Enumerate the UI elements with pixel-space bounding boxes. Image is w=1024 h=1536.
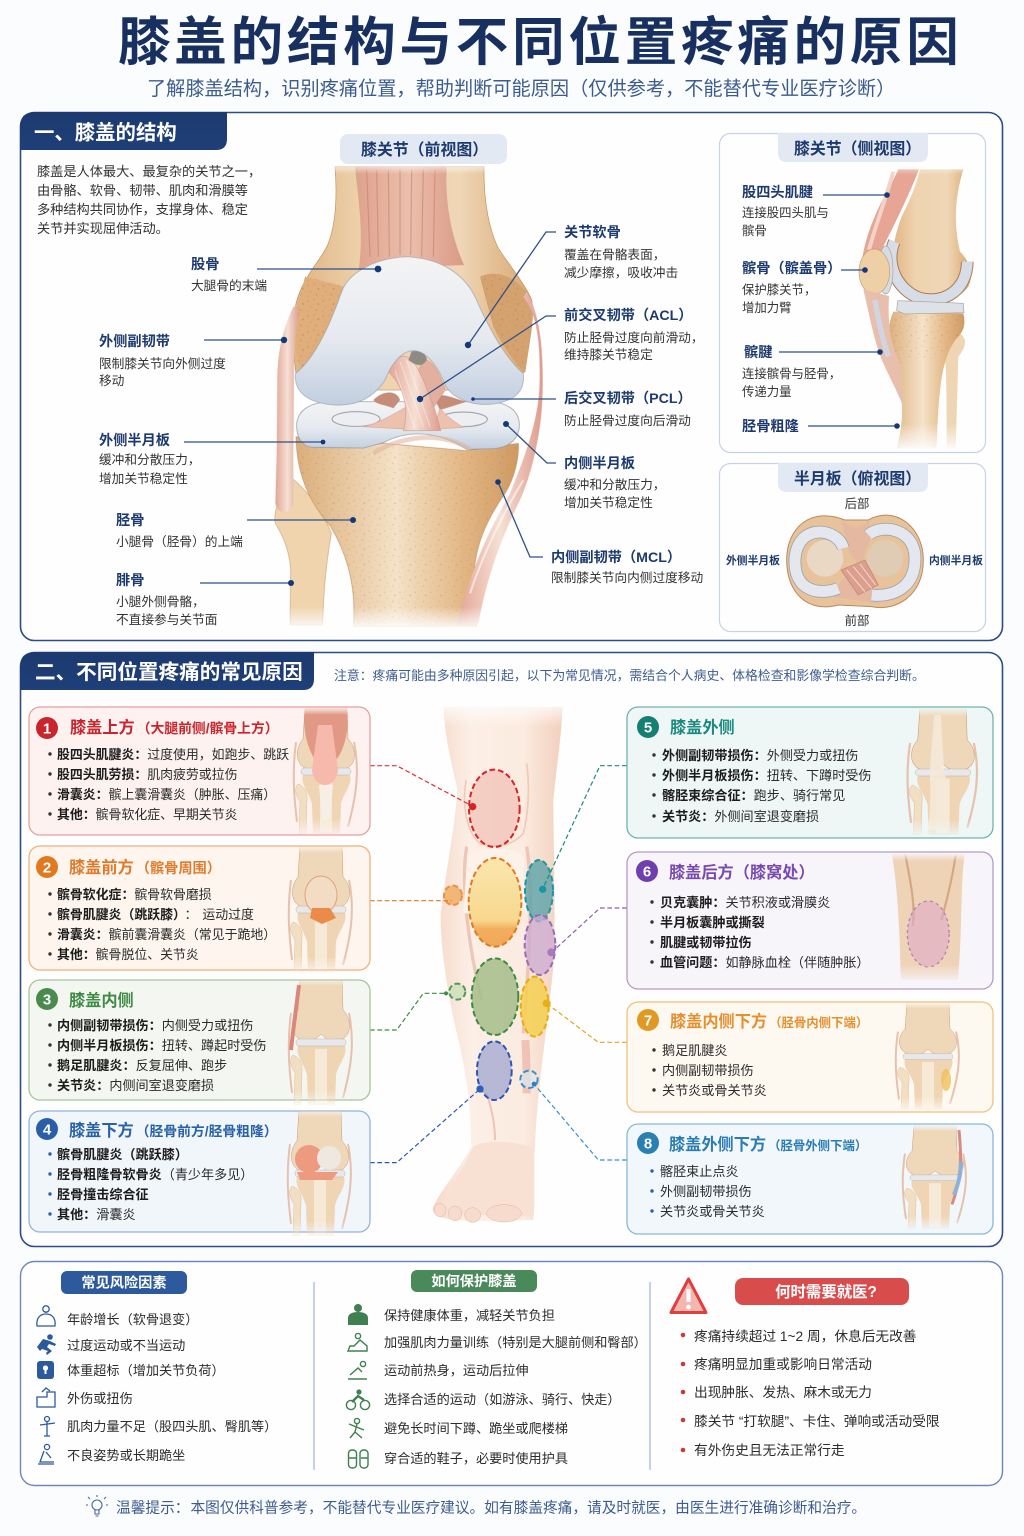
badge 6: 6 [643, 864, 651, 880]
list 7: 关节炎或骨关节炎 [662, 1083, 767, 1098]
label: fibula [116, 573, 218, 627]
side view heading: 膝关节（侧视图） [794, 139, 921, 158]
list 8: 关节炎或骨关节炎 [660, 1204, 765, 1219]
list 2: 髌骨软化症：髌骨软骨磨损 [57, 887, 212, 902]
badge 7: 7 [644, 1012, 652, 1030]
label: quad tendon [742, 185, 890, 238]
section heading: structure [20, 112, 227, 150]
heading 6: 膝盖后方（膝窝处） [669, 863, 815, 882]
list 1: 其他：髌骨软化症、早期关节炎 [57, 807, 238, 822]
label: lateral collateral ligament [99, 333, 226, 388]
leader lines: front view [184, 232, 556, 586]
badge 7 [637, 1009, 659, 1031]
list 6: 半月板囊肿或撕裂 [660, 914, 765, 930]
card 5: lateral [627, 707, 993, 838]
label: lateral collateral ligament: 移动 [99, 374, 124, 388]
zone 2 [444, 858, 521, 947]
thumbnail 8 [903, 1126, 966, 1229]
list 7: 内侧副韧带损伤 [662, 1063, 754, 1078]
label: quad tendon: 髌骨 [742, 223, 767, 238]
intro text: 膝盖是人体最大、最复杂的关节之一， [37, 164, 261, 179]
label: quad tendon: 连接股四头肌与 [742, 205, 829, 220]
labels: meniscus view: 外侧半月板 [726, 553, 780, 567]
intro text [37, 164, 261, 236]
label: fibula: 不直接参与关节面 [116, 612, 218, 627]
list 1 [48, 747, 289, 822]
labels: meniscus view: 后部 [845, 496, 869, 511]
doctor list: 疼痛明显加重或影响日常活动 [694, 1356, 872, 1372]
label: patella: 髌骨（髌盖骨） [742, 260, 841, 277]
label: MCL: 限制膝关节向内侧过度移动 [551, 570, 703, 585]
column: risk factors [37, 1271, 277, 1464]
protection list: 避免长时间下蹲、跪坐或爬楼梯 [384, 1421, 568, 1436]
label: medial meniscus: 增加关节稳定性 [564, 495, 653, 510]
list 3 [48, 1017, 266, 1093]
badge 5 [637, 716, 659, 738]
tip text: 温馨提示：本图仅供科普参考，不能替代专业医疗建议。如有膝盖疼痛，请及时就医，由医生进行准确诊断和治疗。 [116, 1500, 866, 1516]
list 3: 内侧副韧带损伤：内侧受力或扭伤 [57, 1017, 253, 1033]
label: patella [742, 260, 868, 315]
label: cartilage: 关节软骨 [564, 224, 621, 241]
doctor list [681, 1328, 940, 1458]
doctor list: 膝关节 “打软腿”、卡住、弹响或活动受限 [694, 1413, 940, 1429]
thumbnail 3 [289, 979, 352, 1105]
list 3: 关节炎：内侧间室退变磨损 [57, 1077, 214, 1093]
labels: meniscus view [726, 496, 983, 628]
heading 8: 膝盖外侧下方（胫骨外侧下端） [669, 1135, 867, 1154]
list 6 [650, 895, 870, 970]
intro text: 多种结构共同协作，支撑身体、稳定 [37, 201, 248, 217]
list 5: 髂胫束综合征：跑步、骑行常见 [662, 787, 845, 803]
list 6: 血管问题：如静脉血栓（伴随肿胀） [660, 954, 870, 970]
label: lateral meniscus: 外侧半月板 [99, 432, 170, 449]
label: patellar tendon: 传递力量 [742, 384, 792, 399]
badge 8: 8 [644, 1136, 652, 1152]
label: quad tendon: 股四头肌腱 [742, 185, 813, 201]
badge 1: 1 [43, 720, 51, 738]
illustration: leg with pain zones [370, 707, 627, 1222]
card 3: medial [29, 979, 370, 1105]
risk list: 不良姿势或长期跪坐 [67, 1448, 185, 1463]
heading 3: 膝盖内侧 [69, 992, 134, 1010]
label: tibial tuberosity: 胫骨粗隆 [742, 418, 800, 435]
risk heading [61, 1271, 187, 1294]
protection heading: 如何保护膝盖 [431, 1273, 517, 1290]
label: PCL: 防止胫骨过度向后滑动 [564, 413, 691, 428]
zone 4 [477, 1041, 512, 1100]
list 4: 胫骨撞击综合征 [57, 1186, 149, 1202]
list 1: 股四头肌劳损：肌肉疲劳或拉伤 [57, 767, 237, 782]
risk list: 外伤或扭伤 [67, 1391, 133, 1406]
label: medial meniscus: 缓冲和分散压力， [564, 478, 666, 492]
label: tibia: 胫骨 [116, 513, 144, 529]
panel: knee structure [20, 112, 1002, 640]
thumbnail 5 [908, 709, 977, 835]
badge 4 [36, 1118, 58, 1140]
protection list: 加强肌肉力量训练（特别是大腿前侧和臀部） [384, 1334, 647, 1350]
zone 8 [520, 1071, 538, 1088]
label: ACL: 维持膝关节稳定 [564, 347, 653, 362]
label: lateral meniscus [99, 432, 200, 486]
meniscus heading: 半月板（俯视图） [794, 469, 921, 488]
panel: risk, protection, when to see a doctor [20, 1262, 1002, 1486]
badge 2: 2 [43, 860, 51, 876]
protection list [384, 1307, 647, 1466]
label: ACL: 前交叉韧带（ACL） [564, 307, 692, 324]
card 1: above knee [29, 707, 370, 835]
panel: side view [720, 133, 986, 452]
list 6: 肌腱或韧带拉伤 [660, 934, 752, 950]
list 4: 胫骨粗隆骨软骨炎（青少年多见） [57, 1166, 253, 1182]
protection heading [411, 1270, 537, 1292]
list 5: 外侧副韧带损伤：外侧受力或扭伤 [662, 747, 858, 763]
label: femur: 股骨 [191, 257, 219, 273]
zone 5 [525, 860, 553, 921]
section heading: pain causes: 二、不同位置疼痛的常见原因 [35, 660, 303, 684]
zone 7 [521, 977, 549, 1037]
heading 5: 膝盖外侧 [670, 718, 735, 737]
card 6: posterior [627, 852, 993, 989]
label: PCL [564, 390, 692, 428]
column: protection [346, 1270, 647, 1468]
label: patellar tendon: 髌腱 [744, 344, 772, 361]
card 2: front of knee [29, 846, 370, 972]
list 5 [652, 747, 872, 824]
protection icons [346, 1304, 370, 1468]
intro text: 关节并实现屈伸活动。 [37, 221, 169, 236]
label: fibula: 腓骨 [116, 573, 144, 589]
zone 6 [525, 915, 555, 975]
list 4 [48, 1146, 253, 1222]
thumbnail 2 [289, 846, 352, 972]
subtitle: 了解膝盖结构，识别疼痛位置，帮助判断可能原因（仅供参考，不能替代专业医疗诊断） [147, 78, 895, 100]
label: medial meniscus [564, 455, 666, 510]
protection list: 选择合适的运动（如游泳、骑行、快走） [384, 1392, 621, 1407]
front view heading [340, 134, 507, 164]
doctor list: 有外伤史且无法正常行走 [694, 1443, 845, 1458]
risk list [67, 1312, 277, 1463]
list 3: 内侧半月板损伤：扭转、蹲起时受伤 [57, 1037, 266, 1053]
label: lateral collateral ligament: 限制膝关节向外侧过度 [99, 356, 226, 371]
badge 6 [636, 860, 658, 882]
zone 3 [449, 958, 518, 1035]
heading 1: 膝盖上方（大腿前侧/髌骨上方） [70, 718, 279, 737]
list 5: 外侧半月板损伤：扭转、下蹲时受伤 [662, 767, 872, 783]
card 4: below knee [29, 1110, 370, 1236]
label: tibia: 小腿骨（胫骨）的上端 [116, 534, 243, 549]
label: femur: 大腿骨的末端 [191, 278, 267, 293]
label: MCL: 内侧副韧带（MCL） [551, 549, 681, 566]
list 7: 鹅足肌腱炎 [662, 1042, 727, 1058]
column: when to see a doctor [671, 1278, 940, 1458]
label: ACL [564, 307, 704, 362]
list 2: 髌骨肌腱炎（跳跃膝） ： 运动过度 [57, 907, 254, 922]
risk list: 肌肉力量不足（股四头肌、臀肌等） [67, 1418, 277, 1434]
label: medial meniscus: 内侧半月板 [564, 455, 635, 472]
list 6: 贝克囊肿：关节积液或滑膜炎 [660, 895, 830, 910]
list 8: 髂胫束止点炎 [660, 1163, 739, 1179]
list 4: 其他：滑囊炎 [57, 1206, 136, 1222]
panel: pain locations [20, 652, 1002, 1246]
panel: meniscus top view [720, 463, 986, 632]
protection list: 保持健康体重，减轻关节负担 [384, 1307, 555, 1323]
label: patella: 保护膝关节， [742, 283, 816, 297]
list 3: 鹅足肌腱炎：反复屈伸、跑步 [57, 1057, 227, 1073]
card 7: lower medial [627, 1002, 993, 1112]
intro text: 由骨骼、软骨、韧带、肌肉和滑膜等 [37, 182, 248, 198]
doctor list: 疼痛持续超过 1~2 周，休息后无改善 [694, 1328, 916, 1344]
side view heading [778, 133, 928, 162]
list 2: 其他：髌骨脱位、关节炎 [57, 947, 199, 962]
connector lines [370, 766, 627, 1163]
illustration: meniscus top view [787, 515, 923, 608]
section heading: structure: 一、膝盖的结构 [34, 122, 177, 144]
doctor list: 出现肿胀、发热、麻木或无力 [694, 1385, 872, 1400]
thumbnail 4 [288, 1110, 351, 1236]
label: PCL: 后交叉韧带（PCL） [564, 390, 692, 407]
labels: meniscus view: 前部 [845, 613, 869, 628]
card 8: lower lateral [627, 1124, 993, 1234]
list 8 [650, 1163, 765, 1219]
front view heading: 膝关节（前视图） [361, 140, 488, 159]
risk icons [37, 1306, 56, 1464]
heading 7: 膝盖内侧下方（胫骨内侧下端） [670, 1012, 868, 1031]
label: lateral meniscus: 增加关节稳定性 [99, 471, 188, 486]
risk list: 过度运动或不当运动 [67, 1338, 185, 1353]
badge 3 [36, 988, 58, 1010]
badge 1 [36, 717, 58, 739]
zone 1 [469, 770, 520, 847]
label: fibula: 小腿外侧骨骼， [116, 594, 205, 609]
thumbnail 7 [896, 1003, 959, 1110]
label: patellar tendon: 连接髌骨与胫骨， [742, 366, 841, 381]
thumbnail 6 [892, 854, 965, 980]
list 2: 滑囊炎：髌前囊滑囊炎（常见于跪地） [57, 927, 276, 942]
label: ACL: 防止胫骨过度向前滑动， [564, 330, 704, 345]
protection list: 运动前热身，运动后拉伸 [384, 1362, 529, 1378]
label: patellar tendon [742, 344, 883, 399]
label: cartilage: 减少摩擦，吸收冲击 [564, 265, 678, 280]
heading 2: 膝盖前方（髌骨周围） [69, 858, 221, 877]
label: tibial tuberosity [742, 418, 900, 435]
labels: meniscus view: 内侧半月板 [929, 553, 983, 567]
illustration: side view knee [859, 169, 971, 448]
protection list: 穿合适的鞋子，必要时使用护具 [384, 1450, 568, 1466]
footer tip [86, 1495, 866, 1516]
risk heading: 常见风险因素 [81, 1274, 167, 1292]
title: 膝盖的结构与不同位置疼痛的原因 [118, 13, 963, 72]
label: lateral meniscus: 缓冲和分散压力， [99, 453, 200, 467]
badge 8 [637, 1132, 659, 1154]
list 2 [48, 887, 276, 962]
leg body [433, 707, 563, 1222]
icon: warning triangle [671, 1279, 706, 1312]
meniscus heading [778, 463, 928, 492]
doctor heading [735, 1278, 909, 1305]
label: femur [191, 257, 267, 293]
label: patella: 增加力臂 [742, 300, 792, 315]
risk list: 年龄增长（软骨退变） [67, 1312, 198, 1327]
doctor heading: 何时需要就医? [775, 1282, 877, 1301]
list 5: 关节炎：外侧间室退变磨损 [662, 808, 819, 824]
risk list: 体重超标（增加关节负荷） [67, 1363, 225, 1378]
thumbnail 1 [294, 708, 357, 834]
label: cartilage [564, 224, 678, 280]
label: lateral collateral ligament: 外侧副韧带 [99, 333, 170, 350]
list 7 [652, 1042, 767, 1098]
badge 5: 5 [644, 720, 652, 736]
icon: light bulb [86, 1495, 108, 1516]
label: tibia [116, 513, 243, 549]
note: 注意：疼痛可能由多种原因引起，以下为常见情况，需结合个人病史、体格检查和影像学检查综合判断。 [334, 668, 925, 683]
section heading: pain causes [20, 652, 314, 690]
badge 4: 4 [43, 1122, 52, 1138]
heading 4: 膝盖下方（胫骨前方/胫骨粗隆） [69, 1121, 278, 1140]
list 4: 髌骨肌腱炎（跳跃膝） [57, 1146, 188, 1162]
illustration: front view knee [275, 167, 543, 627]
badge 2 [36, 856, 58, 878]
list 1: 滑囊炎：髌上囊滑囊炎（肿胀、压痛） [57, 787, 276, 802]
list 8: 外侧副韧带损伤 [660, 1184, 752, 1199]
badge 3: 3 [43, 992, 51, 1008]
label: MCL [551, 549, 703, 585]
list 1: 股四头肌腱炎：过度使用，如跑步、跳跃 [57, 747, 289, 762]
label: cartilage: 覆盖在骨骼表面， [564, 247, 666, 262]
